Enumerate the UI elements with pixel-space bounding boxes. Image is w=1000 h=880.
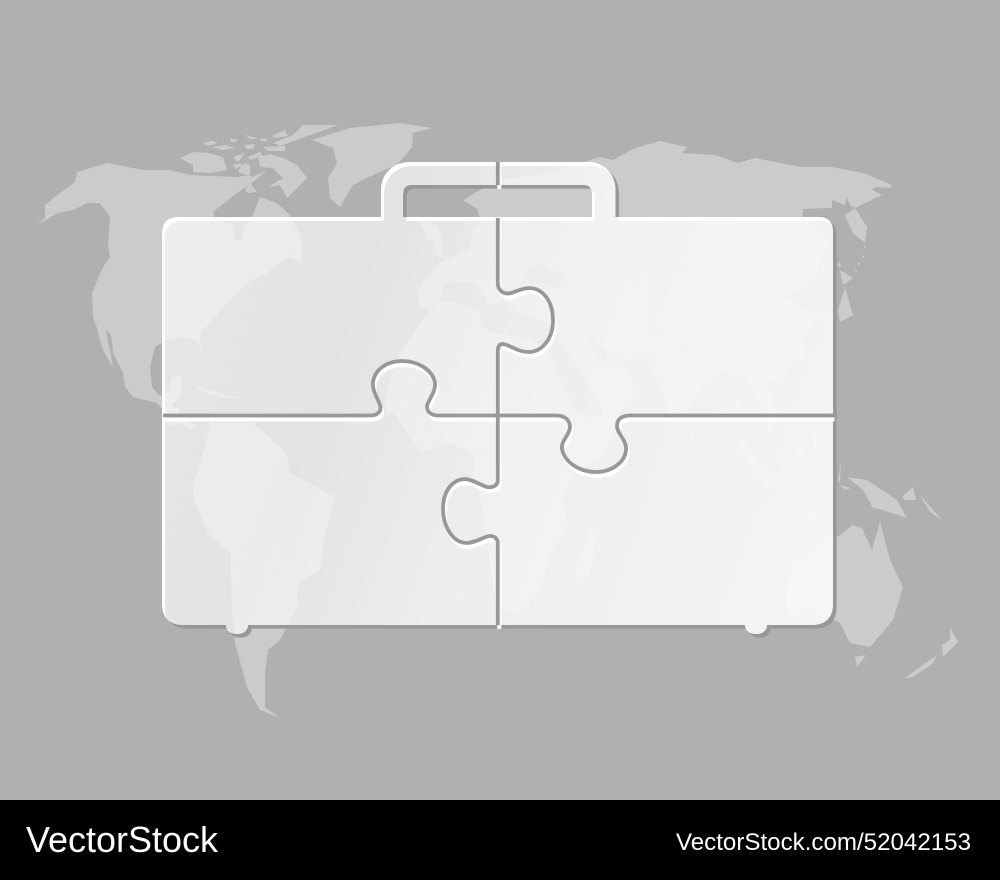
- footer logo text: VectorStock: [26, 819, 219, 860]
- puzzle briefcase: [162, 162, 837, 638]
- briefcase body and handle: [165, 166, 833, 634]
- briefcase highlight: [162, 162, 833, 634]
- footer image id: VectorStock.com/52042153: [676, 829, 971, 856]
- light streaks: [230, 218, 800, 625]
- puzzle seam highlight: [164, 166, 834, 629]
- footer bar: [0, 800, 1000, 880]
- world map seen through the briefcase: [37, 123, 958, 717]
- puzzle seams: [163, 162, 833, 625]
- world map: [37, 123, 958, 717]
- briefcase shadow: [166, 166, 837, 638]
